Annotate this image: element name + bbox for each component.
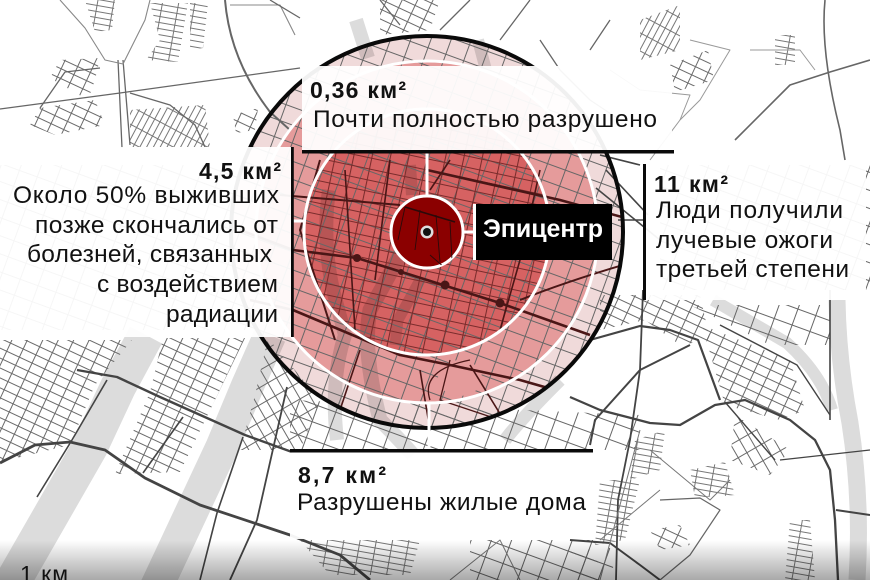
- panel: 4.5 km2: болезней, связанных: [27, 241, 272, 268]
- panel: 8.7 km2: 8,7 км²: [298, 462, 386, 488]
- central city roads: [240, 160, 620, 420]
- blast zone discs: [231, 36, 623, 428]
- epicentre label: Эпицентр: [483, 215, 603, 243]
- epicentre label: [473, 204, 612, 260]
- panel: 0.36 km2: 0,36 км²: [310, 77, 406, 103]
- panel: 8.7 km2: Разрушены жилые дома: [297, 489, 586, 516]
- road junctions: [353, 254, 504, 308]
- panel: 11 km2: третьей степени: [656, 256, 849, 283]
- zone ring: 11 km2 black outline: [231, 36, 623, 428]
- panel: 11 km2: 11 км²: [654, 171, 728, 197]
- panel: 4.5 km2: 4,5 км²: [199, 158, 281, 184]
- panel: 4.5 km2: Около 50% выживших: [13, 182, 279, 209]
- panel: 11 km2: [643, 164, 866, 300]
- panel: 4.5 km2: [0, 147, 294, 337]
- zone ring: 4.5 km2 white outline: [304, 109, 550, 355]
- panel: 8.7 km2: [290, 449, 595, 539]
- bottom fade and map edge: [0, 540, 870, 580]
- zone ring: 8.7 km2 white outline: [256, 61, 598, 403]
- leader lines: [293, 150, 476, 450]
- panel: 0.36 km2: [302, 66, 674, 154]
- inner zone: 0.36 km2: [391, 196, 463, 268]
- epicentre marker: [420, 226, 434, 238]
- panel: 4.5 km2: с воздействием: [97, 271, 278, 298]
- panel: 4.5 km2: позже скончались от: [35, 212, 278, 239]
- panel: 4.5 km2: радиации: [166, 301, 278, 328]
- panel: 11 km2: лучевые ожоги: [656, 227, 833, 254]
- panel: 0.36 km2: Почти полностью разрушено: [313, 106, 657, 133]
- panel: 11 km2: Люди получили: [656, 197, 843, 224]
